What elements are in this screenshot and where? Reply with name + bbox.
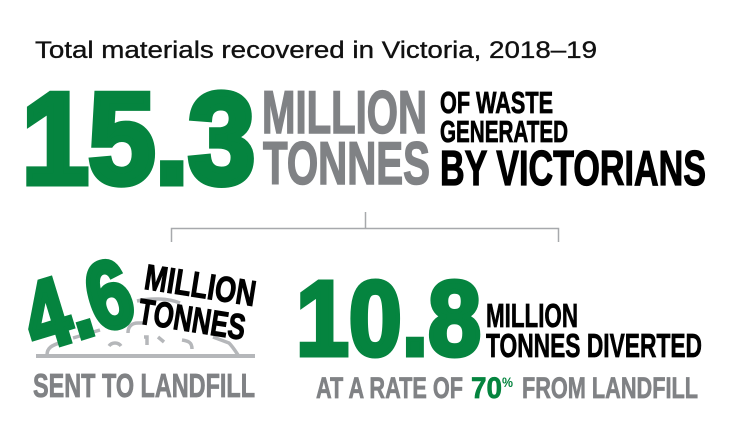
title: Total materials recovered in Victoria, 2018–19	[35, 37, 597, 64]
caption: diversion rate	[316, 372, 698, 405]
of waste generated by Victorians	[440, 85, 706, 196]
caption: sent to landfill: SENT TO LANDFILL	[33, 367, 255, 404]
connector bracket	[172, 212, 558, 242]
million tonnes: TONNES	[263, 130, 430, 197]
caption: diversion rate: 70	[471, 372, 502, 405]
headline: total waste generated	[22, 67, 706, 211]
panel: diverted from landfill	[296, 260, 702, 405]
million tonnes	[262, 79, 430, 197]
of waste generated by Victorians: OF WASTE	[440, 85, 553, 120]
number 10.8: 10.8	[296, 260, 481, 378]
million tonnes, tilted: TONNES	[135, 291, 249, 348]
big number 15.3: 15.3	[22, 67, 255, 211]
million tonnes: MILLION	[262, 79, 427, 146]
panel: sent to landfill	[11, 238, 259, 404]
caption: diversion rate: %	[502, 374, 513, 390]
number 4.6: 4.6	[11, 238, 145, 372]
million tonnes, tilted: MILLION	[142, 256, 259, 314]
million tonnes, tilted	[135, 256, 259, 349]
icon: landfill pile	[36, 299, 255, 356]
of waste generated by Victorians: GENERATED	[440, 114, 568, 149]
million tonnes diverted	[486, 297, 702, 364]
caption: diversion rate: AT A RATE OF	[316, 372, 463, 405]
million tonnes diverted: MILLION	[486, 297, 578, 334]
